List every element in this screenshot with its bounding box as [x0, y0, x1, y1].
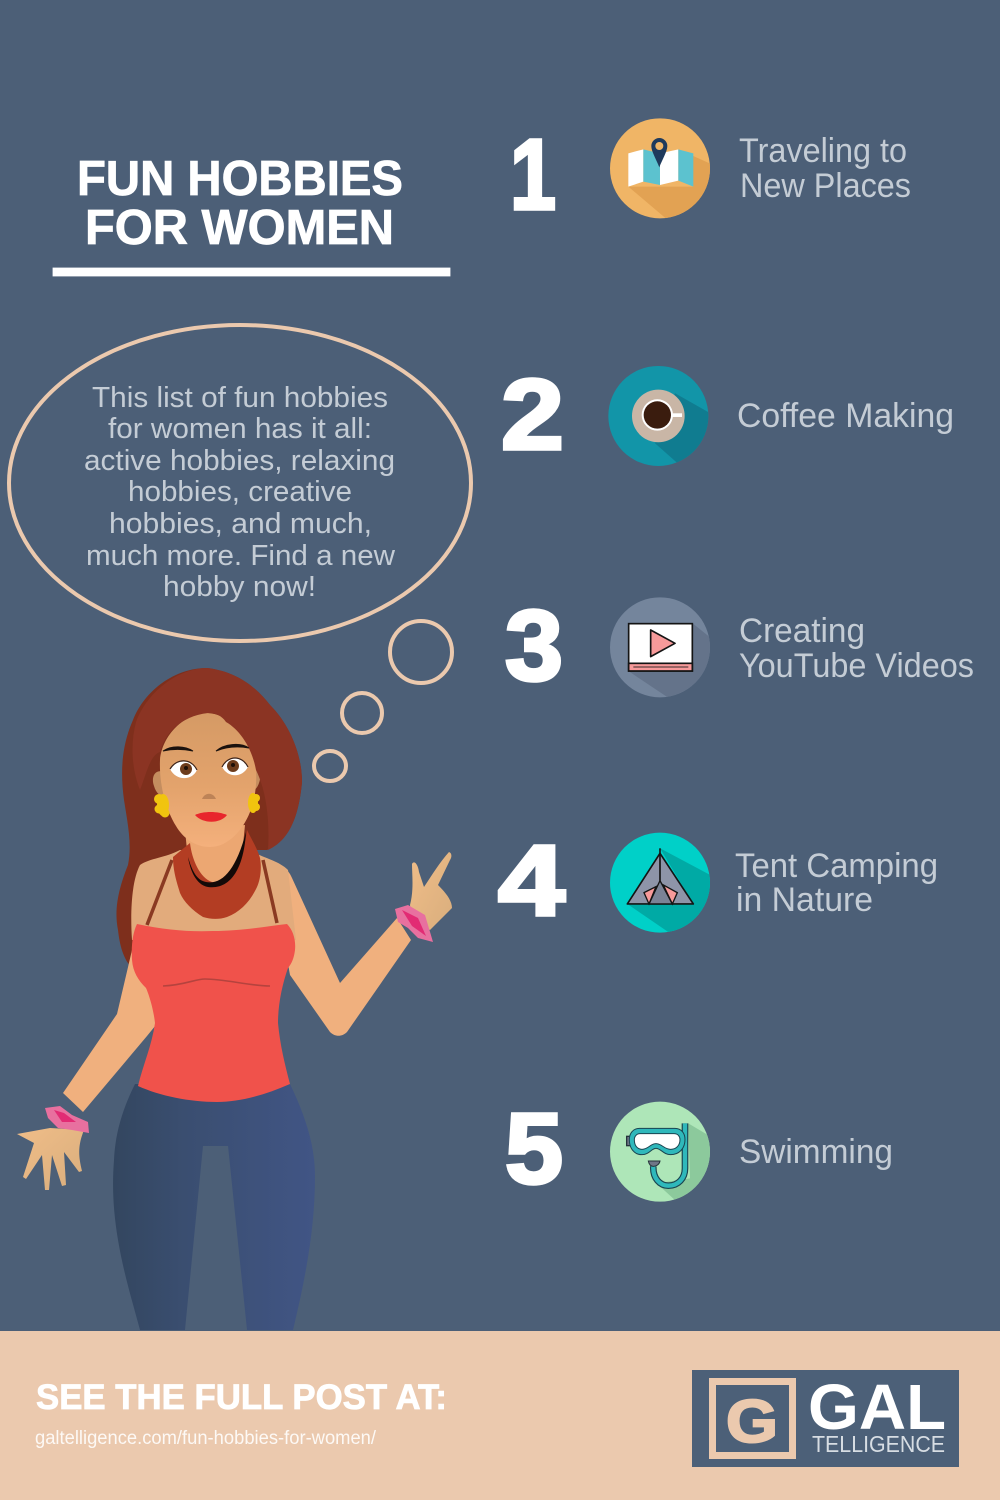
left arm: [63, 950, 160, 1112]
footer url: galtelligence.com/fun-hobbies-for-women/: [35, 1428, 377, 1449]
footer band: [0, 1331, 1000, 1500]
torso skin: [131, 850, 296, 940]
thought bubble with intro text: hobbies, creative: [128, 476, 352, 508]
thought circles: [314, 621, 452, 781]
logo: G: [726, 1388, 778, 1455]
label: tent camping: [735, 847, 938, 919]
icon: tent: [610, 833, 713, 937]
number 4: 4: [498, 825, 565, 937]
ears: [153, 766, 260, 797]
number 3: 3: [505, 590, 563, 702]
label: tent camping: in Nature: [736, 881, 873, 919]
title: FOR WOMEN: [85, 201, 394, 255]
thought bubble with intro text: This list of fun hobbies: [92, 382, 388, 414]
title: FUN HOBBIES: [77, 152, 403, 206]
label: creating youtube videos: Creating: [739, 612, 865, 650]
right scrunchie: [395, 905, 433, 942]
icon: video player: [610, 597, 713, 700]
label: creating youtube videos: YouTube Videos: [739, 647, 974, 685]
hair front: [133, 668, 302, 850]
number 2: 2: [501, 359, 564, 471]
thought bubble with intro text: [9, 325, 471, 641]
woman illustration: [17, 668, 452, 1330]
face: [160, 713, 256, 847]
label: traveling: Traveling to: [739, 132, 907, 170]
thought bubble with intro text: much more. Find a new: [86, 540, 396, 572]
jeans: [113, 1084, 315, 1330]
eyebrows: [163, 744, 249, 751]
top seam: [163, 979, 270, 986]
label: traveling: [739, 132, 911, 205]
scarf: [173, 830, 261, 919]
label: coffee making: Coffee Making: [737, 397, 954, 435]
neck: [185, 825, 245, 884]
thought bubble with intro text: for women has it all:: [108, 413, 372, 445]
earrings: [154, 793, 260, 818]
eyes: [170, 758, 248, 778]
icon: snorkel: [610, 1102, 713, 1205]
straps: [147, 860, 277, 925]
logo: GAL: [808, 1371, 946, 1443]
logo: [692, 1370, 959, 1467]
lips: [195, 812, 227, 822]
thought bubble with intro text: hobbies, and much,: [109, 508, 372, 540]
red top: [132, 924, 295, 1102]
label: traveling: New Places: [740, 167, 911, 205]
label: swimming: Swimming: [739, 1133, 893, 1171]
icon: map: [610, 118, 713, 223]
hair back: [116, 668, 302, 966]
icon: coffee: [608, 366, 713, 468]
right hand: [410, 852, 452, 930]
scarf shadow line: [188, 832, 246, 887]
left scrunchie: [45, 1106, 89, 1133]
title: [53, 152, 450, 276]
right arm: [270, 862, 411, 1036]
thought bubble with intro text: hobby now!: [163, 571, 316, 603]
logo: TELLIGENCE: [812, 1431, 945, 1457]
left hand: [17, 1128, 84, 1190]
label: tent camping: Tent Camping: [735, 847, 938, 885]
number 1: 1: [510, 119, 556, 231]
nose: [202, 794, 216, 799]
label: creating youtube videos: [739, 612, 974, 685]
number 5: 5: [505, 1093, 563, 1205]
footer call to action: SEE THE FULL POST AT:: [36, 1378, 447, 1417]
thought bubble with intro text: active hobbies, relaxing: [84, 445, 395, 477]
